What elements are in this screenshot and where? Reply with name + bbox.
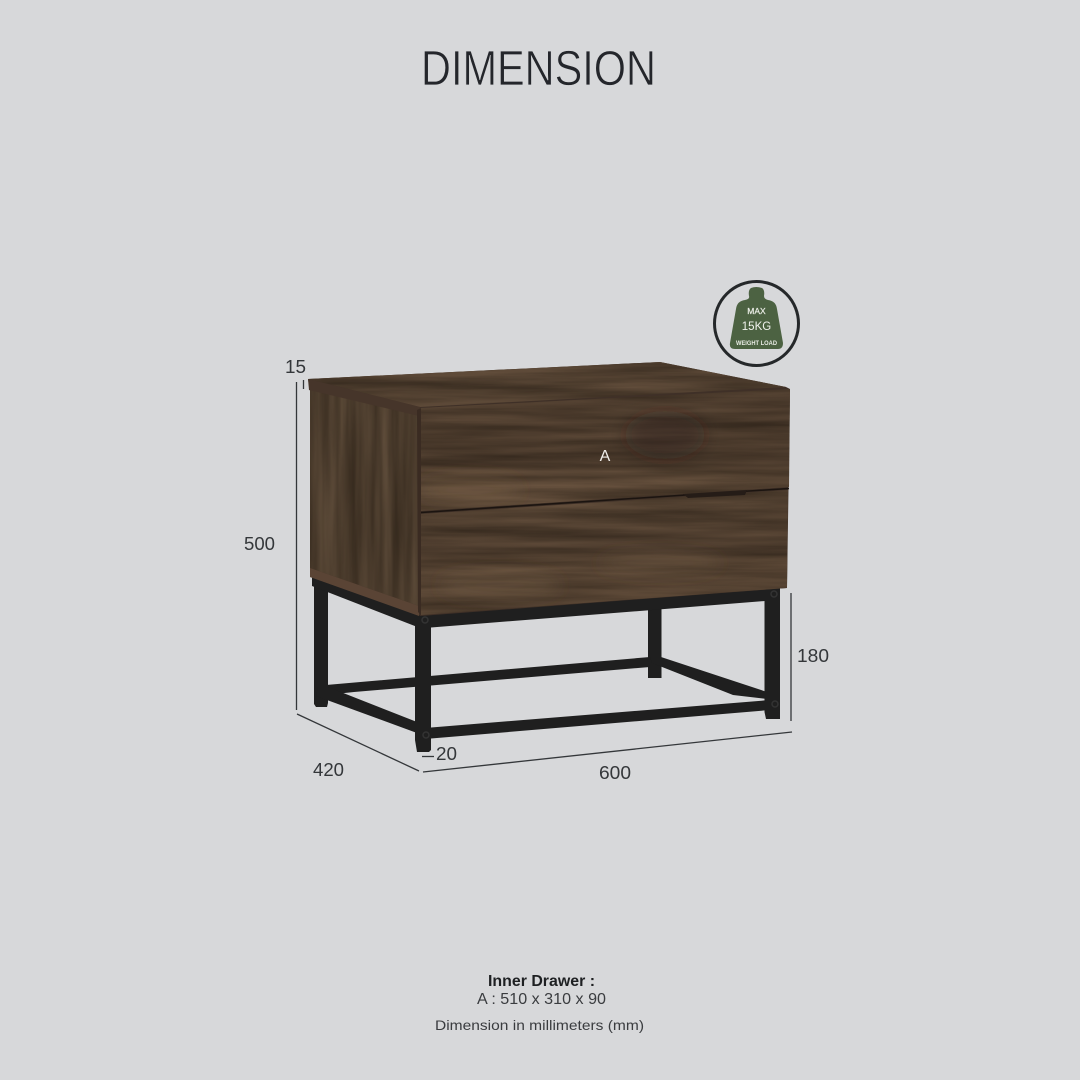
dimension label: 20: 20: [436, 743, 457, 764]
lower drawer front: [421, 490, 788, 615]
side panel bottom trim: [310, 568, 419, 616]
leg bolts: [422, 591, 778, 738]
badge text: weight load: WEIGHT LOAD: [736, 341, 778, 347]
dimension label: 180: 180: [797, 645, 829, 666]
side panel: [310, 390, 418, 606]
front left leg: [415, 615, 431, 752]
dimension label: 600: 600: [599, 762, 631, 783]
depth line: [297, 714, 419, 771]
right bottom rail: [650, 657, 767, 699]
foot height tick: [422, 756, 434, 758]
top thickness tick: [302, 380, 304, 389]
metal frame: [312, 576, 780, 752]
drawer handle: [683, 490, 747, 498]
back left leg: [314, 578, 328, 707]
inner drawer heading: Inner Drawer :: [488, 973, 595, 990]
left top rail: [312, 576, 420, 628]
title: DIMENSION: [421, 42, 656, 96]
units note: Dimension in millimeters (mm): [435, 1017, 644, 1033]
cabinet: [300, 355, 800, 620]
front bottom rail: [425, 700, 770, 739]
cabinet top panel: [308, 362, 786, 407]
inner drawer size: A : 510 x 310 x 90: [477, 991, 606, 1008]
drawer label A: A: [600, 448, 611, 465]
back bottom rail: [326, 657, 650, 695]
gap between drawers: [421, 488, 789, 512]
left bottom rail: [316, 687, 417, 733]
drawer front left edge: [417, 408, 421, 615]
back right leg: [648, 600, 662, 678]
dimension label: 15: 15: [285, 356, 306, 377]
badge text: 15kg: 15KG: [742, 321, 771, 333]
front top rail: [418, 587, 780, 628]
dimension label: 500: 500: [244, 533, 275, 554]
cabinet base silhouette: [308, 362, 790, 616]
dimension label: 420: 420: [313, 759, 344, 780]
dimension lines: [296, 380, 792, 772]
height line: [296, 382, 298, 710]
width line: [423, 732, 792, 772]
footer notes: [435, 973, 644, 1033]
top panel left edge: [308, 379, 420, 416]
icon: weight: [730, 287, 783, 349]
leg height line: [790, 593, 792, 721]
badge text: max: MAX: [747, 306, 766, 316]
weight load badge: [714, 282, 798, 366]
top drawer front: [415, 385, 795, 515]
right front leg: [764, 590, 780, 719]
